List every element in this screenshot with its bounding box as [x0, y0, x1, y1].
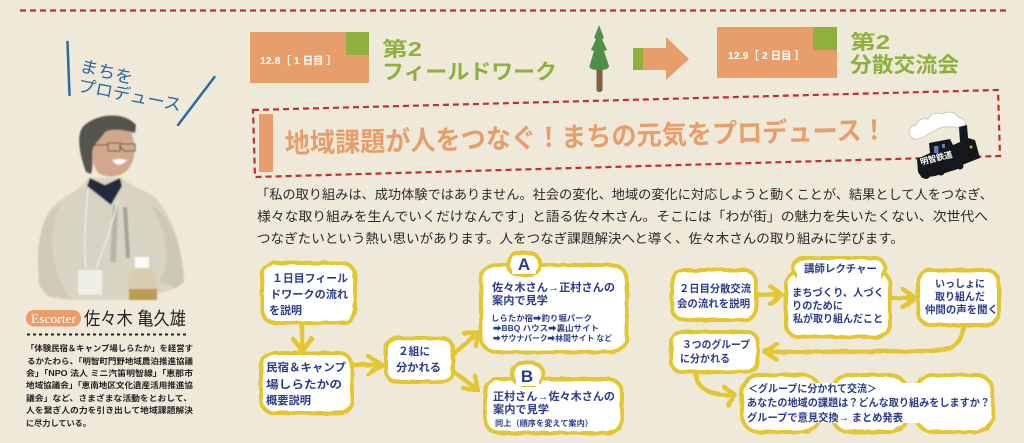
- heading: field work: 第2: [382, 38, 422, 61]
- box: day 2 overview: [672, 270, 756, 320]
- panel: day 1 label: 12.8［ 1 日目 ］: [260, 55, 337, 67]
- box: group B: 案内で見学: [493, 402, 549, 416]
- box: group A: [481, 253, 627, 352]
- box: Minshuku and camp site overview: 概要説明: [266, 393, 311, 407]
- box: day 1 field work overview: [262, 263, 355, 323]
- box: Minshuku and camp site overview: [261, 353, 352, 413]
- box: day 1 field work overview: ドワークの流れ: [270, 287, 348, 301]
- photo: Sasaki Kikuo: [38, 116, 184, 300]
- heading: field work: [382, 38, 557, 84]
- biography text: に尽力している。: [26, 418, 91, 428]
- box: group B: 同上（順序を変えて案内）: [495, 418, 593, 428]
- box: group exchange: グループで意見交換→ まとめ発表: [747, 411, 903, 424]
- box: group A: A: [518, 255, 530, 274]
- heading: distributed exchange: [850, 31, 959, 77]
- box: split into two groups: [386, 338, 453, 382]
- box: group A: 案内で見学: [492, 293, 548, 307]
- heading: machi wo produce: プロデュース: [76, 75, 183, 115]
- panel: escorter profile: [26, 42, 214, 428]
- heading: machi wo produce: [68, 42, 214, 125]
- box: group B: [485, 363, 622, 433]
- biography text: 人を繋ぎ人の力を引き出して地域課題解決: [26, 405, 194, 415]
- title: 地域課題が人をつなぐ！まちの元気をプロデュース！: [284, 114, 887, 159]
- box: split into three groups: に分かれる: [680, 352, 730, 365]
- text block: introduction: つなぎたいという熱い思いがあります。人をつなぎ課題解決へと導く、佐々木さんの取り組みに学びます。: [257, 231, 904, 246]
- icon: steam train: [909, 112, 980, 179]
- panel: day 2 label: 12.9［ 2 日目 ］: [728, 50, 805, 62]
- biography text: 「体験民宿＆キャンプ場しらたか」を経営す: [26, 343, 193, 353]
- panel: day 2 label: [717, 27, 837, 78]
- panel: title banner: [253, 90, 1000, 179]
- icon: tree: [589, 25, 609, 92]
- heading: distributed exchange: 第2: [850, 31, 890, 54]
- box: hear from peers: いっしょに: [935, 278, 985, 290]
- box: day 1 field work overview: を説明: [269, 303, 302, 317]
- text block: introduction: 様々な取り組みを生んでいくだけなんです」と語る佐々木さん。そこには「わが街」の魅力を失いたくない、次世代へ: [257, 209, 988, 224]
- box: group A: ➡サウナパーク➡林間サイト など: [493, 333, 612, 343]
- box: hear from peers: 取り組んだ: [935, 290, 985, 303]
- heading: distributed exchange: 分散交流会: [850, 54, 959, 77]
- box: day 2 overview: 会の流れを説明: [677, 297, 750, 310]
- box: split into two groups: 分かれる: [396, 360, 441, 374]
- box: split into three groups: ３つのグループ: [682, 338, 750, 351]
- name: 佐々木 亀久雄: [84, 309, 186, 329]
- box: Minshuku and camp site overview: 場しらたかの: [266, 377, 342, 391]
- box: split into two groups: ２組に: [398, 344, 430, 358]
- box: lecturer lecture: りのために: [792, 300, 843, 312]
- box: lecturer lecture: 講師レクチャー: [804, 262, 877, 275]
- flow chart: day 2: [671, 258, 999, 432]
- box: lecturer lecture: まちづくり、人づく: [792, 286, 884, 299]
- badge: Escorter: Escorter: [31, 311, 77, 326]
- flow chart: day 1: [261, 253, 627, 433]
- arrows: day 2 flow: [696, 286, 963, 405]
- box: day 2 overview: ２日目分散交流: [679, 282, 751, 295]
- box: group A: しらたか宿➡釣り堀パーク: [491, 313, 592, 323]
- box: split into three groups: [671, 332, 758, 372]
- box: hear from peers: [918, 270, 999, 325]
- heading: machi wo produce: まちを: [78, 56, 135, 88]
- box: group exchange: あなたの地域の課題は？どんな取り組みをしますか？: [747, 396, 990, 409]
- box: group exchange: ＜グループに分かれて交流＞: [748, 382, 877, 395]
- box: lecturer lecture: [786, 258, 890, 337]
- text block: introduction: 「私の取り組みは、成功体験ではありません。社会の変化、地域の変化に対応しようと動くことが、結果として人をつなぎ、: [256, 187, 993, 202]
- box: group exchange: [742, 375, 993, 432]
- box: group B: B: [521, 367, 533, 386]
- box: Minshuku and camp site overview: 民宿＆キャンプ: [266, 360, 346, 374]
- box: hear from peers: 仲間の声を聞く: [925, 303, 998, 316]
- arrows: day 1 flow: [293, 322, 478, 390]
- arrow: day 1 to day 2: [633, 37, 689, 80]
- box: group A: ➡BBQ ハウス➡裏山サイト: [493, 323, 599, 333]
- box: group B: 正村さん→佐々木さんの: [493, 389, 615, 403]
- heading: field work: フィールドワーク: [382, 61, 557, 84]
- icon: steam train: 明智鉄道: [919, 149, 954, 167]
- text block: introduction: [256, 187, 993, 246]
- biography text: [26, 343, 194, 428]
- biography text: 地域協議会」「恵南地区文化遺産活用推進協: [26, 380, 193, 390]
- box: day 1 field work overview: １日目フィール: [272, 272, 348, 285]
- box: group A: 佐々木さん→正村さんの: [492, 280, 615, 294]
- panel: day 1 label: [250, 32, 369, 83]
- biography text: 会」「NPO 法人 ミニ汽笛明智線」「恵那市: [26, 368, 193, 378]
- biography text: るかたわら、「明智町門野地域農泊推進協議: [27, 356, 193, 366]
- box: lecturer lecture: 私が取り組んだこと: [793, 312, 883, 325]
- biography text: 議会」など、さまざまな活動をとおして、: [26, 393, 192, 403]
